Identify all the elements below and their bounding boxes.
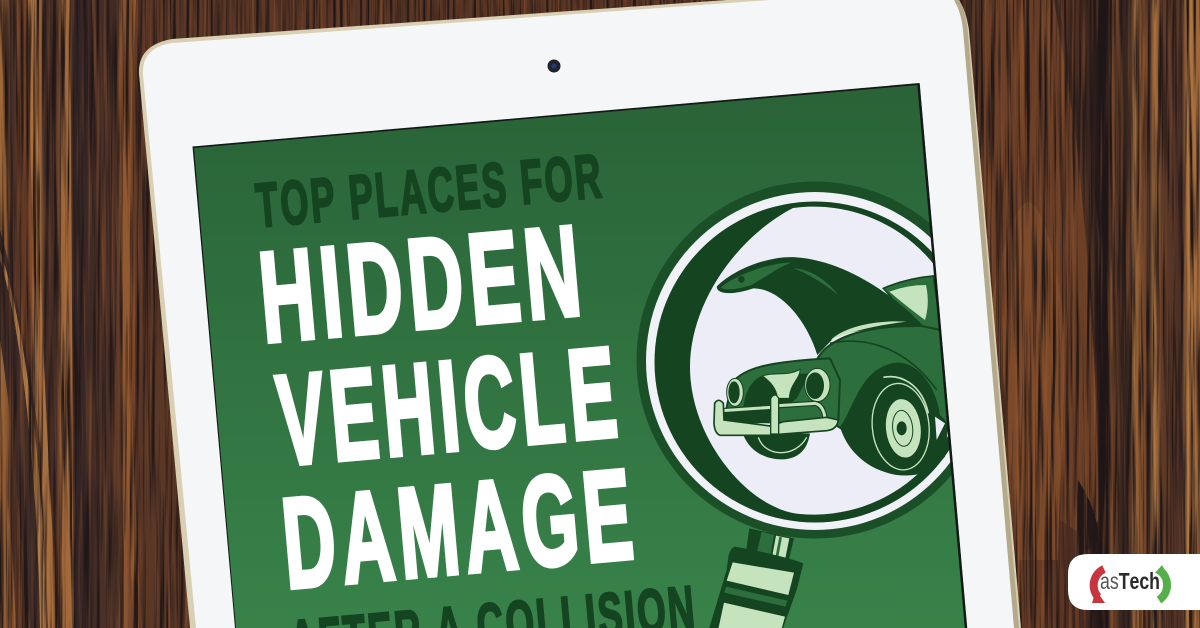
bumper (714, 395, 838, 435)
heading: top places for: TOP PLACES FOR (253, 141, 606, 240)
windshield (883, 276, 942, 333)
icon: magnifying glass with car (636, 182, 952, 628)
logo: red arc (1092, 569, 1105, 603)
heading: vehicle: VEHICLE (272, 319, 627, 492)
hood (717, 257, 924, 355)
nose (723, 358, 840, 423)
logo: wordmark: asTech (1100, 568, 1160, 594)
screen right edge (918, 84, 966, 628)
tablet: dark right side shading (952, 0, 1019, 628)
logo badge: asTech (1068, 554, 1200, 610)
magnifier lens (690, 207, 968, 515)
car: front end (714, 358, 840, 459)
magnifier handle (707, 528, 803, 628)
panel: green infographic screen (180, 70, 994, 628)
magnifier rings (636, 182, 952, 538)
tablet: front camera (548, 60, 560, 72)
car body (816, 325, 947, 430)
headlights (727, 378, 743, 406)
car: rear and hood (717, 257, 950, 475)
front wheel (743, 433, 810, 459)
heading: hidden: HIDDEN (254, 200, 592, 370)
rear wheel arch and tyre (840, 363, 948, 475)
tablet: white face (143, 0, 1014, 628)
logo: green arc (1155, 565, 1168, 600)
tablet: gold metal edge (139, 0, 1021, 628)
screen bezel line (192, 83, 967, 628)
grille (763, 369, 800, 398)
heading: damage: DAMAGE (277, 443, 643, 616)
